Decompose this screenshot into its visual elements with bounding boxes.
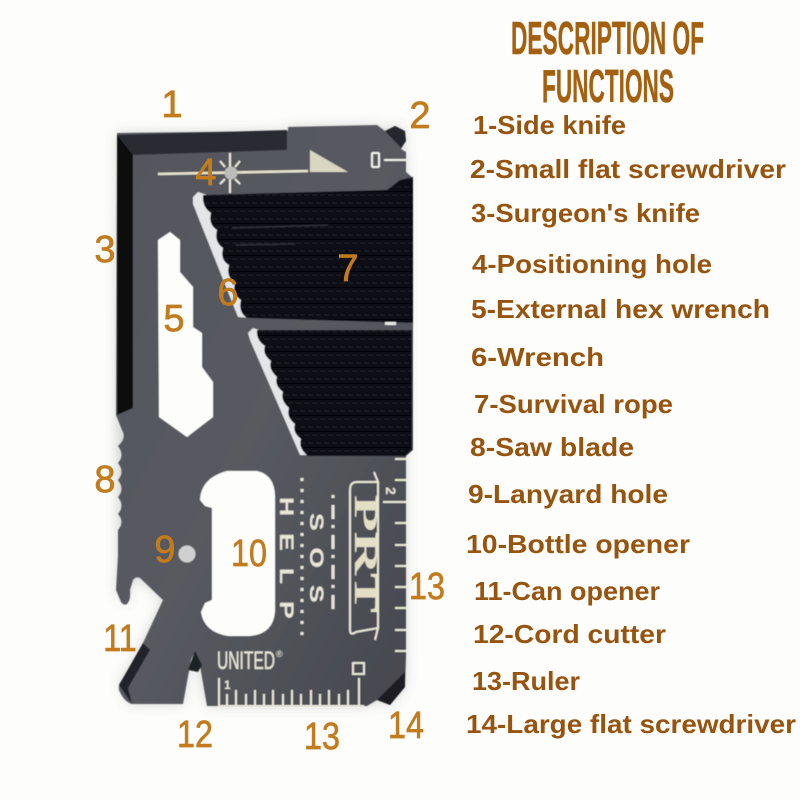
diagram number labels: 10 — [231, 533, 267, 575]
morse lines — [302, 478, 333, 643]
bottom ruler — [218, 678, 364, 706]
PRT logo: PRT — [347, 495, 384, 614]
function list: 10-Bottle opener — [466, 529, 690, 559]
diagram number labels: 1 — [161, 84, 183, 126]
function list: 14-Large flat screwdriver — [466, 709, 796, 739]
knife marking line and arrow — [158, 150, 348, 174]
function list: 7-Survival rope — [474, 389, 673, 419]
diagram number labels: 8 — [94, 459, 116, 501]
function list: 5-External hex wrench — [471, 294, 770, 324]
function list: 3-Surgeon's knife — [471, 198, 700, 228]
diagram number labels: 4 — [195, 152, 217, 194]
external hex wrench slot — [158, 232, 213, 437]
function list: 8-Saw blade — [470, 432, 634, 462]
diagram number labels: 13 — [304, 716, 340, 758]
bottle opener opening — [200, 471, 275, 636]
function list: 11-Can opener — [474, 576, 660, 606]
cord cutter shade — [188, 651, 202, 672]
diagram number labels: 5 — [163, 298, 185, 340]
function list: 1-Side knife — [473, 110, 626, 140]
ruler number 1: 1 — [224, 678, 231, 692]
diagram number labels: 13 — [409, 566, 445, 608]
rope gap mark — [385, 322, 396, 325]
diagram number labels: 9 — [154, 529, 176, 571]
function list: 4-Positioning hole — [472, 249, 712, 279]
diagram number labels: 14 — [388, 705, 424, 747]
function list: 13-Ruler — [472, 666, 580, 696]
function list: 6-Wrench — [471, 342, 604, 372]
registered mark: ® — [276, 649, 283, 659]
diagram number labels: 3 — [94, 229, 116, 271]
lower wrench slot — [248, 328, 310, 455]
HELP engraving: HELP — [276, 497, 297, 619]
diagram number labels: 6 — [217, 272, 239, 314]
function list: 9-Lanyard hole — [468, 479, 668, 509]
function list — [466, 110, 796, 739]
positioning hole star — [220, 153, 240, 193]
diagram number labels: 2 — [409, 95, 431, 137]
ruler zero mark — [353, 663, 364, 674]
side knife bevel — [117, 130, 287, 155]
tool body — [116, 125, 413, 706]
small flat screwdriver tip — [385, 126, 406, 148]
lanyard hole — [178, 546, 196, 562]
function list: 2-Small flat screwdriver — [470, 154, 786, 184]
right ruler — [383, 459, 406, 651]
surgeon's knife bevel — [117, 135, 133, 415]
multi-tool card — [116, 125, 413, 706]
survival rope upper coil — [203, 177, 413, 323]
diagram number labels: 7 — [337, 248, 359, 290]
function list: 12-Cord cutter — [473, 619, 666, 649]
diagram number labels: 12 — [177, 714, 213, 756]
side bevel near can opener — [119, 643, 150, 704]
upper wrench slot — [193, 192, 250, 318]
diagram number labels: 11 — [103, 618, 137, 660]
diagram number labels — [94, 84, 445, 758]
PRT logo — [347, 472, 384, 640]
UNITED brand: UNITED — [217, 647, 275, 675]
large flat screwdriver tip — [377, 672, 405, 705]
ruler number 2: 2 — [383, 487, 399, 495]
title — [511, 12, 704, 112]
SOS engraving: SOS — [306, 513, 327, 603]
small screwdriver zero mark — [372, 153, 406, 167]
survival rope lower coil — [257, 330, 412, 456]
